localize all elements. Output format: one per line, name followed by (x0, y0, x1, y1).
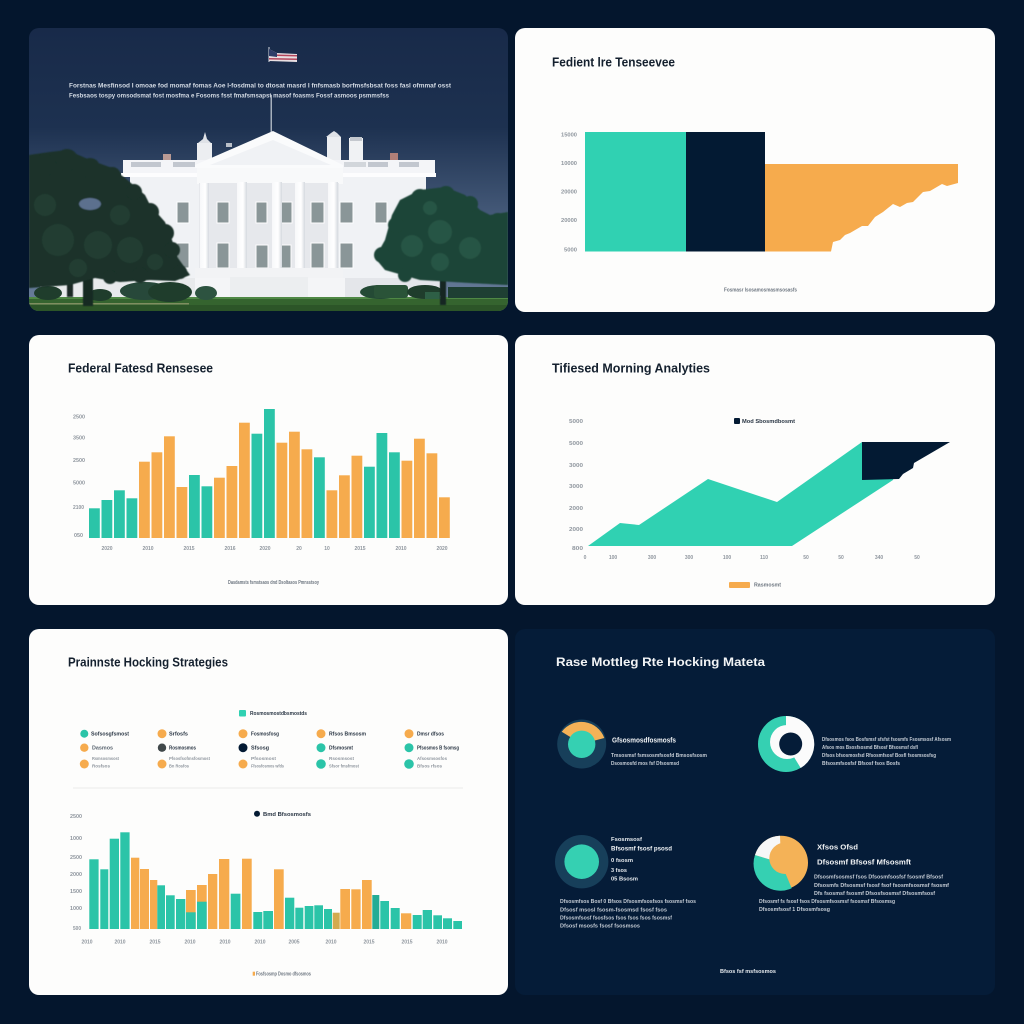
column 5 (404, 729, 459, 769)
y axis labels: 5000 (569, 419, 583, 425)
x axis labels: 50 (838, 555, 844, 561)
lawn (29, 297, 508, 311)
x axis labels: 2010 (325, 940, 337, 946)
caption: Fosfsosmp Dosmo dfsosmos (256, 971, 311, 977)
text block 1 (611, 736, 707, 767)
y axis labels: 1500 (70, 889, 82, 895)
panel: stacked area chart (515, 28, 995, 312)
column 1: Dasmos (92, 746, 113, 752)
y axis labels (561, 132, 577, 254)
column 4: Dfsmosmt (329, 746, 353, 752)
column 5: Dmsr dfsos (417, 732, 444, 738)
intro text: Fesbsaos tospy omsodsmat fost mosfma e Fosoms fsst fmafsmsapst masof foasms Fossf asmoos psmmsfss (69, 92, 389, 100)
column 1: Rosfsos (92, 764, 110, 768)
flagpole (271, 95, 272, 132)
x axis labels: 110 (760, 555, 768, 561)
heading: Rase Mottleg Rte Hocking Mateta (556, 657, 766, 669)
paragraph 3: Dfsosf msosl fsosm-fsosmsd fsosf fsos (560, 908, 667, 914)
x axis labels: 2020 (436, 546, 448, 552)
x axis labels: 0 (584, 555, 587, 561)
chart legend: navy: Bmd Bfsosmosfs (263, 812, 311, 818)
text block 4: Dfs fsosmsf fsosmf Dfsosfsosmsf Dfsosmfsosf (814, 891, 935, 897)
x axis labels: 2015 (149, 940, 161, 946)
columns (200, 182, 338, 270)
y axis labels: 3000 (569, 484, 583, 490)
intro text: Forstnas Mesfinsod I omoae fod momaf fomas Aoe I-fosdmal to dtosat masrd I fnfsmasb borfmsfsbsat foss fasl ofmmaf osst (69, 82, 452, 90)
tree: left oak (29, 149, 190, 306)
y axis labels (70, 814, 82, 932)
x axis labels: 100 (723, 555, 731, 561)
x axis labels: 20 (296, 546, 302, 552)
caption: Fosmasr lsosamosmasmsosasfs (724, 288, 797, 294)
panel: White House photo (29, 28, 508, 311)
column 1 (80, 730, 129, 768)
y axis labels: 2500 (70, 855, 82, 861)
y axis labels: 2500 (73, 458, 85, 464)
text block 3 (611, 837, 672, 883)
panel: area chart morning analytics (515, 335, 995, 605)
y axis labels (73, 414, 85, 539)
column 5: Bfsos rfsos (417, 764, 442, 768)
shrubs (34, 282, 508, 302)
x axis labels: 2010 (184, 940, 196, 946)
teal area (588, 442, 905, 546)
y axis labels: 3000 (569, 463, 583, 469)
paragraph 3: Dfsosf msosfs fsosf fsosmsos (560, 924, 640, 930)
text block 1: Gfsosmosdfosmosfs (612, 736, 676, 744)
y axis labels: 20000 (561, 190, 577, 196)
donut 1 (557, 720, 606, 768)
column 2: Rosmosmos (169, 746, 196, 752)
chart legend: navy (254, 811, 311, 818)
y axis labels: 5000 (569, 441, 583, 447)
panel: hedging strategies (29, 629, 508, 995)
x axis labels (81, 940, 448, 946)
column 3 (238, 729, 284, 768)
caption: Dasdamsts fsmstsaos dnd Dsoltasos Pmnsstsoy (228, 580, 319, 586)
column 4: Rsosmsost (329, 756, 355, 761)
x axis labels: 2010 (436, 940, 448, 946)
text block 2: Dfsosmos fsos Bosfsmsf sfsfst fsosmfs Fsosmsosf Afsosm (822, 737, 951, 743)
y axis labels: 050 (74, 533, 83, 539)
y axis labels (569, 419, 583, 552)
x axis labels: 2010 (114, 940, 126, 946)
text block 2 (822, 737, 951, 767)
donut 3 (555, 835, 608, 888)
panel: rate hedging metrics (515, 629, 995, 995)
x axis labels: 2010 (81, 940, 93, 946)
text block 3: 0 fsosm (611, 858, 633, 864)
heading: Fedient lre Tenseevee (552, 54, 675, 70)
y axis labels: 3500 (73, 436, 85, 442)
x axis labels: 2015 (183, 546, 195, 552)
donut 2 (758, 716, 814, 772)
text block 4: Dfsosmfsosf 1 Dfsosmfsosg (759, 907, 830, 913)
strategy dot grid (80, 729, 459, 769)
y axis labels: 2500 (70, 814, 82, 820)
text block 2: Bfsosmfsosfsf Bfsosf fsos Bosfs (822, 761, 900, 767)
text block 4: Xfsos Ofsd (817, 843, 858, 852)
orange area (765, 164, 958, 252)
x axis labels: 50 (803, 555, 809, 561)
column 5: Afsosmsosfos (417, 756, 447, 761)
y axis labels: 500 (73, 926, 81, 932)
y axis labels: 1000 (70, 836, 82, 842)
x axis labels: 2015 (401, 940, 413, 946)
legend: orange (729, 582, 781, 588)
heading: Tifiesed Morning Analyties (552, 360, 710, 376)
x axis labels (101, 546, 448, 552)
text block 1: Dsosmosfd mos fsf Dfsosmsd (611, 761, 679, 767)
y axis labels: 2000 (569, 527, 583, 533)
x axis labels: 50 (914, 555, 920, 561)
heading: Prainnste Hocking Strategies (68, 654, 228, 670)
text block 2: Dfsos bfsosmosfsd Rfsosmfsosf Bosfl fsosmsosfsg (822, 753, 936, 759)
y axis labels: 20000 (561, 218, 577, 224)
x axis labels: 100 (609, 555, 617, 561)
paragraph 3 (560, 899, 696, 930)
intro text (69, 82, 452, 100)
x axis labels (584, 555, 920, 561)
text block 4: Dfsosmf fs fsosf fsos Dfsosmfsosmsf fsosmsf Bfsosmsg (759, 899, 895, 905)
column 4: Sfsor fmsfmost (329, 764, 359, 768)
legend: navy: Mod Sbosmdbosmt (742, 419, 795, 425)
column 1: Rsmsosmsost (92, 756, 119, 761)
column 1: Sofsosgfsmost (91, 732, 129, 738)
x axis labels: 2005 (288, 940, 300, 946)
legend: orange: Rasmosmt (754, 582, 781, 588)
y axis labels: 2000 (70, 872, 82, 878)
text block 4: Dfsosmfs Dfsosmsf fsosf fsof fsosmfsosmsf fsosmf (814, 883, 949, 889)
column 3: Fosmosfosg (251, 732, 279, 738)
x axis labels: 2010 (219, 940, 231, 946)
x axis labels: 2010 (142, 546, 154, 552)
building: White House (40, 131, 440, 297)
paragraph 3: Dfsosmfsos Bosf 0 Bfsos Dfsosmfsosfsos fsosmsf fsos (560, 899, 696, 905)
column 2: Srfosfs (169, 732, 188, 738)
text block 2: Afsos mos Bsosfsosmd Bfsosf Bfsosmsf dsfl (822, 745, 918, 751)
y axis labels: 5000 (564, 248, 577, 254)
paragraph 3: Dfsosmfsosf fsosfsos fsos fsos fsos fsosmsf (560, 916, 672, 922)
navy area (862, 442, 950, 480)
y axis labels: 10000 (561, 161, 577, 167)
x axis labels: 2010 (395, 546, 407, 552)
y axis labels: 5000 (73, 480, 85, 486)
column 3: Sfsosg (251, 746, 269, 752)
top legend: Rosmosmostdbsmostds (250, 711, 307, 717)
footer note: Bfsos fsf msfsosmos (720, 969, 776, 975)
text block 4: Dfsosmfsosmsf fsos Dfsosmfsosfsf fsosmf Bfsosf (814, 875, 943, 881)
teal block (585, 132, 686, 252)
text block 3: Bfsosmf fsosf psosd (611, 846, 672, 852)
pie 4 (754, 836, 808, 891)
heading: Federal Fatesd Rensesee (68, 360, 213, 376)
tree: right pine (374, 186, 508, 305)
windows (177, 202, 387, 268)
navy block (686, 132, 765, 252)
text block 3: 3 fsos (611, 868, 627, 874)
text block 4 (759, 843, 949, 913)
y axis labels: 2000 (569, 506, 583, 512)
x axis labels: 300 (648, 555, 656, 561)
column 2: Bn Rosfos (169, 764, 189, 768)
text block 3: 05 Bsosm (611, 877, 638, 883)
bars (89, 409, 450, 538)
y axis labels: 2500 (73, 414, 85, 420)
y axis labels: 15000 (561, 132, 577, 138)
column 3: Pfsosmost (251, 756, 277, 761)
x axis labels: 340 (875, 555, 883, 561)
x axis labels: 2016 (224, 546, 236, 552)
x axis labels: 2010 (254, 940, 266, 946)
column 2 (158, 729, 210, 768)
column 3: Ffsosfosmos wfds (251, 764, 284, 768)
bars (89, 832, 462, 929)
x axis labels: 2015 (363, 940, 375, 946)
text block 3: Fsosmsosf (611, 837, 642, 843)
y axis labels: 2100 (73, 505, 84, 511)
panel: bar chart federal (29, 335, 508, 605)
x axis labels: 10 (324, 546, 330, 552)
x axis labels: 2015 (354, 546, 366, 552)
icon: American flag (268, 47, 297, 62)
y axis labels: 1000 (70, 906, 82, 912)
top legend (239, 710, 307, 717)
x axis labels: 300 (685, 555, 693, 561)
x axis labels: 2020 (259, 546, 271, 552)
text block 4: Dfsosmf Bfsosf Mfsosmft (817, 857, 912, 866)
column 5: Pfsosmos B fsomsg (417, 746, 459, 752)
column 4 (316, 729, 366, 769)
y axis labels: 800 (572, 546, 583, 552)
column 2: Pfsosfsofmsfosmost (169, 756, 210, 761)
stairs (230, 277, 308, 297)
column 4: Rfsos Bmsosm (329, 732, 366, 738)
x axis labels: 2020 (101, 546, 113, 552)
text block 1: Tmsosmsf fsmsosmfsosfd Bmsosfsosm (611, 753, 707, 759)
